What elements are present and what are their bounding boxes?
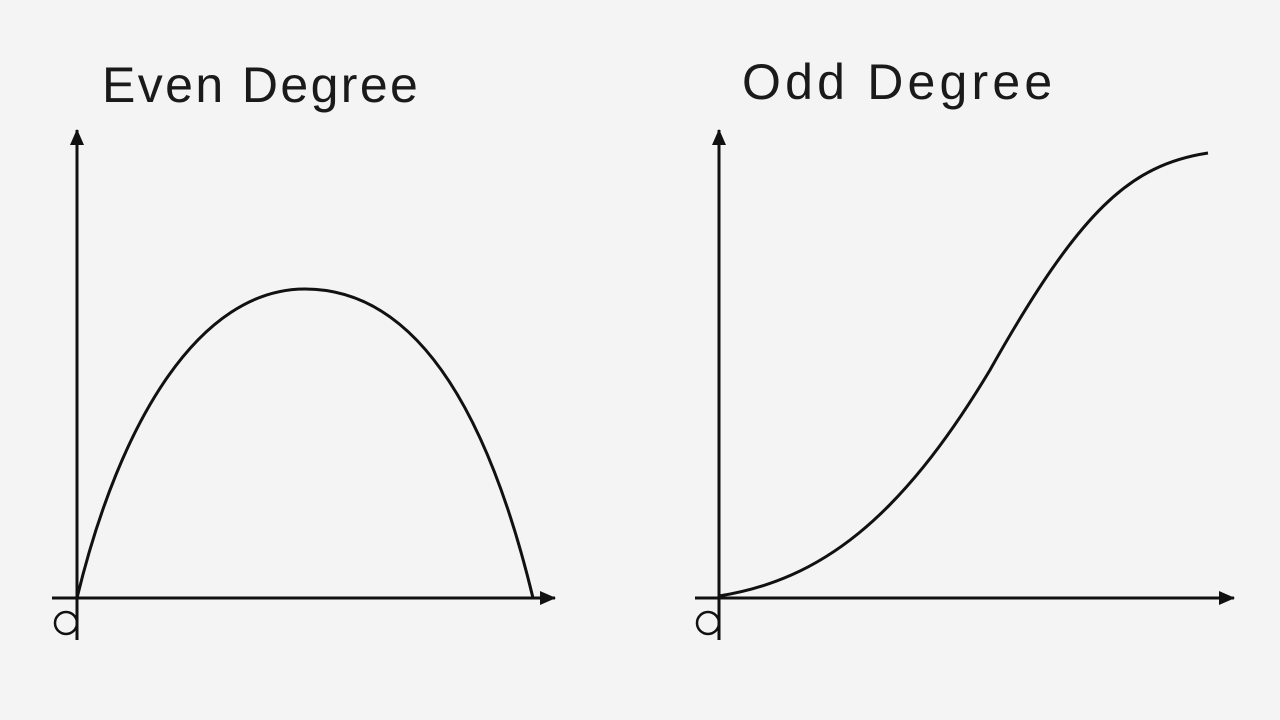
chart: even degree [52,130,555,640]
title: odd degree: Odd Degree [742,54,1056,110]
title: even degree: Even Degree [102,57,420,113]
chart: odd degree [695,130,1234,640]
